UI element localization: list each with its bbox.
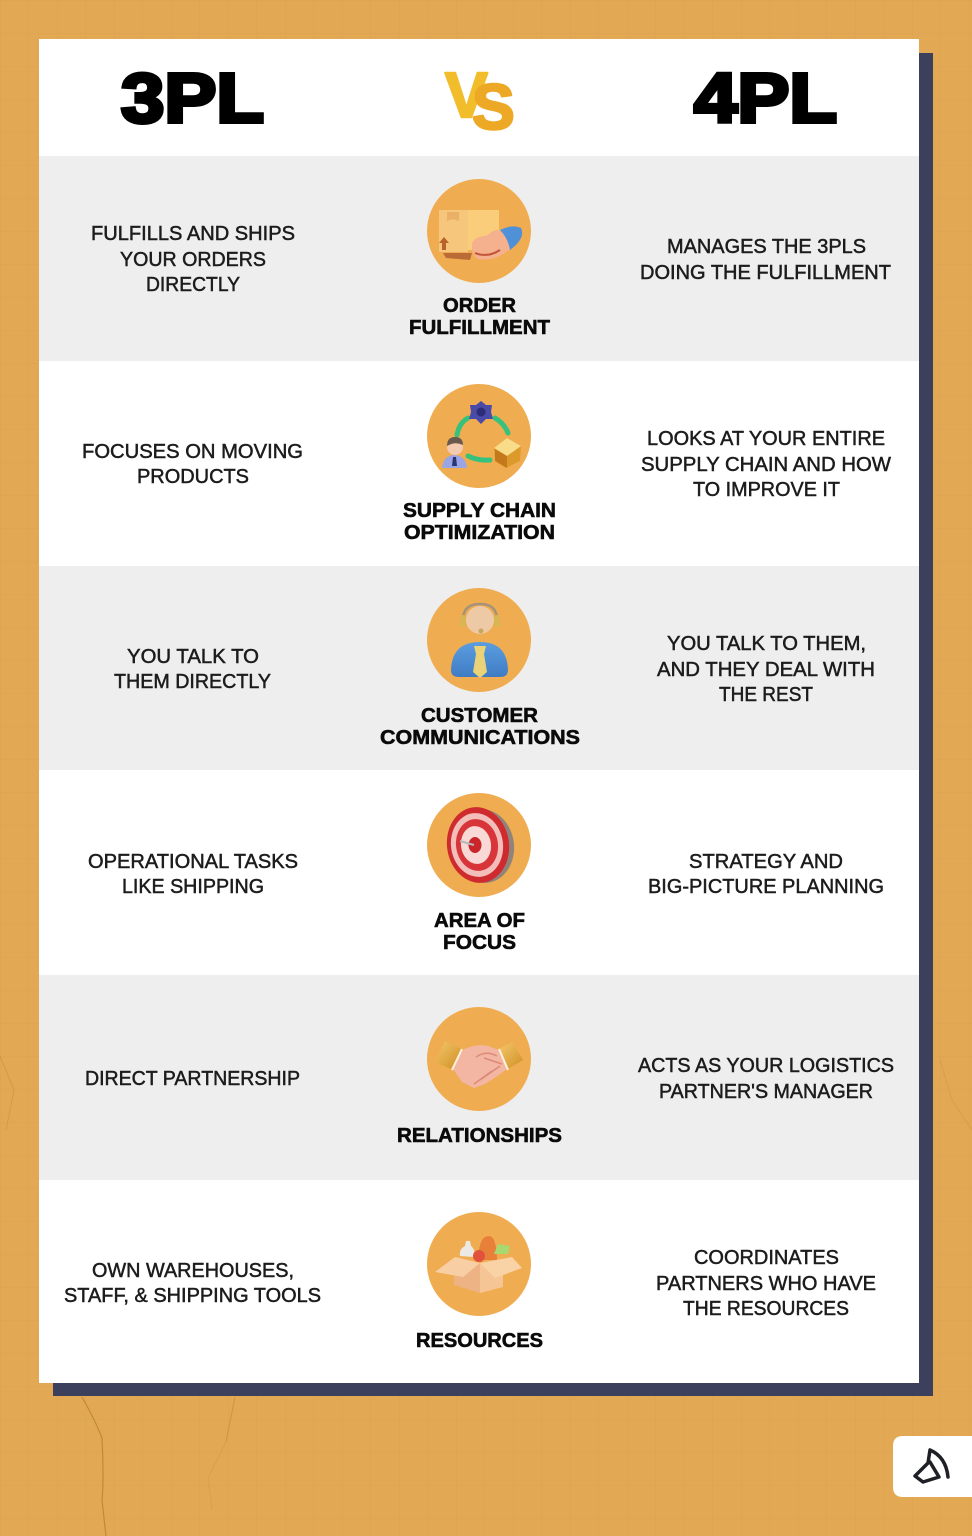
icon: supply chain cycle bbox=[427, 384, 531, 488]
3PL text: order fulfillment: FULFILLS AND SHIPS bbox=[91, 223, 295, 245]
icon: target bbox=[427, 793, 531, 897]
4PL text: area of focus: STRATEGY AND bbox=[689, 851, 843, 873]
4PL text: customer communications bbox=[657, 633, 875, 706]
4PL text: order fulfillment: MANAGES THE 3PLS bbox=[667, 236, 866, 258]
4PL text: customer communications: YOU TALK TO THEM, bbox=[667, 633, 866, 655]
label: supply chain optimization: OPTIMIZATION bbox=[404, 521, 555, 544]
3PL text: supply chain: FOCUSES ON MOVING bbox=[82, 441, 303, 463]
3PL text: resources bbox=[64, 1260, 321, 1307]
4PL text: customer communications: THE REST bbox=[719, 684, 813, 706]
3PL text: customer communications: YOU TALK TO bbox=[127, 646, 259, 668]
label: resources: RESOURCES bbox=[416, 1329, 543, 1352]
label: supply chain optimization: SUPPLY CHAIN bbox=[403, 499, 556, 522]
row: resources bbox=[64, 1212, 876, 1352]
heading: 4PL: 4PL bbox=[694, 59, 837, 137]
logo badge bbox=[893, 1436, 972, 1497]
4PL text: order fulfillment: DOING THE FULFILLMENT bbox=[640, 262, 891, 284]
label: area of focus: FOCUS bbox=[443, 931, 516, 954]
3PL text: area of focus: OPERATIONAL TASKS bbox=[88, 851, 298, 873]
4PL text: area of focus bbox=[648, 851, 884, 898]
label: order fulfillment: FULFILLMENT bbox=[409, 316, 550, 339]
3PL text: customer communications: THEM DIRECTLY bbox=[114, 671, 271, 693]
3PL text: relationships: DIRECT PARTNERSHIP bbox=[85, 1068, 300, 1090]
3PL text: resources: OWN WAREHOUSES, bbox=[92, 1260, 294, 1282]
4PL text: relationships bbox=[638, 1055, 894, 1103]
label: customer communications: CUSTOMER bbox=[421, 704, 538, 727]
4PL text: supply chain: LOOKS AT YOUR ENTIRE bbox=[647, 428, 885, 450]
4PL text: resources: COORDINATES bbox=[694, 1247, 839, 1269]
4PL text: customer communications: AND THEY DEAL WITH bbox=[657, 659, 875, 681]
icon: VS badge: S bbox=[472, 71, 515, 143]
row: supply chain optimization bbox=[82, 384, 891, 544]
4PL text: supply chain: SUPPLY CHAIN AND HOW bbox=[641, 454, 891, 476]
4PL text: supply chain bbox=[641, 428, 891, 501]
4PL text: resources: THE RESOURCES bbox=[683, 1298, 849, 1320]
label: order fulfillment bbox=[409, 294, 550, 339]
4PL text: relationships: PARTNER'S MANAGER bbox=[659, 1081, 873, 1103]
3PL text: order fulfillment bbox=[91, 223, 295, 296]
row: relationships bbox=[85, 1007, 894, 1147]
row: order fulfillment bbox=[91, 179, 891, 339]
card shadow bbox=[53, 53, 933, 1396]
row: area of focus bbox=[88, 793, 884, 954]
3PL text: area of focus bbox=[88, 851, 298, 898]
4PL text: area of focus: BIG-PICTURE PLANNING bbox=[648, 876, 884, 898]
label: area of focus: AREA OF bbox=[434, 909, 525, 932]
label: area of focus bbox=[434, 909, 525, 954]
label: order fulfillment: ORDER bbox=[443, 294, 516, 317]
3PL text: resources: STAFF, & SHIPPING TOOLS bbox=[64, 1285, 321, 1307]
heading: 3PL: 3PL bbox=[121, 59, 264, 137]
row: customer communications bbox=[114, 588, 875, 749]
4PL text: supply chain: TO IMPROVE IT bbox=[693, 479, 840, 501]
3PL text: area of focus: LIKE SHIPPING bbox=[122, 876, 264, 898]
icon: box in hand bbox=[427, 179, 531, 283]
4PL text: relationships: ACTS AS YOUR LOGISTICS bbox=[638, 1055, 894, 1077]
icon: open box of goods bbox=[427, 1212, 531, 1316]
label: customer communications bbox=[380, 704, 580, 749]
label: relationships: RELATIONSHIPS bbox=[397, 1124, 562, 1147]
3PL text: order fulfillment: DIRECTLY bbox=[146, 274, 240, 296]
icon: VS badge: V bbox=[445, 59, 488, 131]
4PL text: resources bbox=[656, 1247, 876, 1320]
3PL text: customer communications bbox=[114, 646, 271, 693]
icon: logo mark bbox=[915, 1450, 948, 1482]
4PL text: order fulfillment bbox=[640, 236, 891, 284]
icon: customer agent bbox=[427, 588, 531, 692]
3PL text: order fulfillment: YOUR ORDERS bbox=[120, 249, 266, 271]
label: supply chain optimization bbox=[403, 499, 556, 544]
3PL text: supply chain: PRODUCTS bbox=[137, 466, 249, 488]
4PL text: resources: PARTNERS WHO HAVE bbox=[656, 1273, 876, 1295]
3PL text: supply chain bbox=[82, 441, 303, 488]
label: customer communications: COMMUNICATIONS bbox=[380, 726, 580, 749]
icon: handshake bbox=[427, 1007, 531, 1111]
comparison card bbox=[39, 39, 919, 1383]
icon: VS badge bbox=[445, 59, 515, 143]
